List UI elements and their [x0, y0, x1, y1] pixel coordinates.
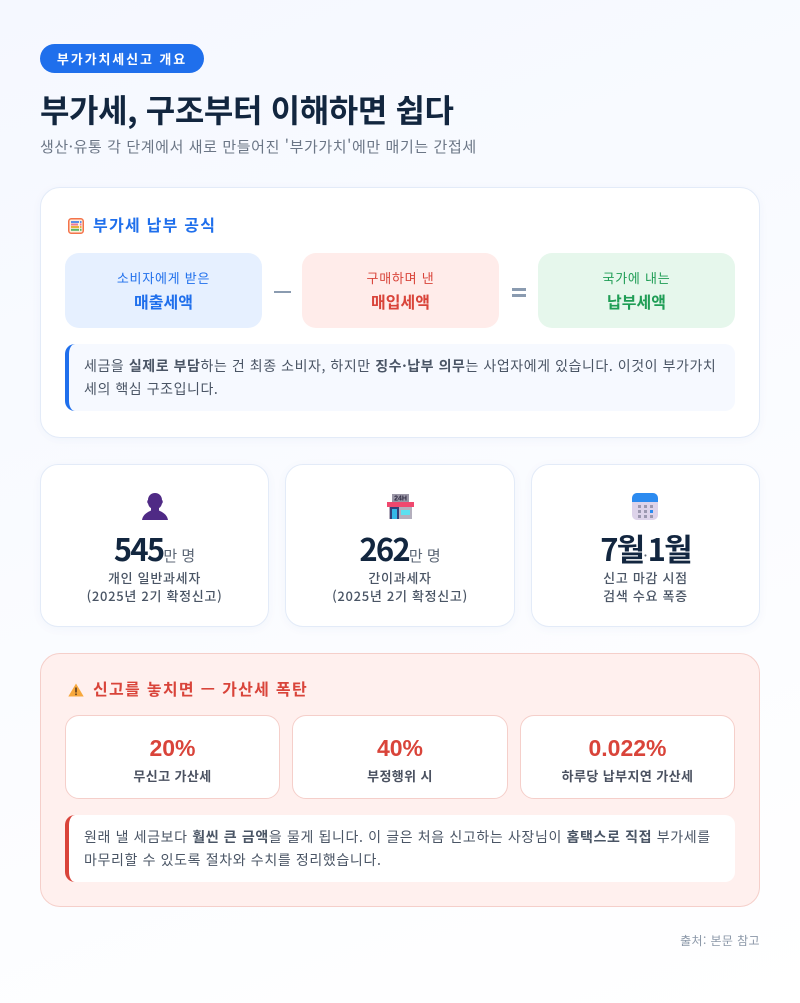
icon: store: 24H	[394, 496, 407, 502]
stat card: simplified taxpayers: (2025년 2기 확정신고)	[332, 586, 468, 605]
penalty card: fraud	[292, 715, 508, 799]
stat card: deadlines	[531, 464, 760, 627]
formula box: payable tax	[538, 253, 735, 328]
stat card: simplified taxpayers: 간이과세자	[368, 568, 432, 587]
panel: formula	[40, 187, 760, 438]
stat card: general taxpayers: 545만 명	[114, 525, 195, 570]
stat card: general taxpayers	[40, 464, 269, 627]
title: 부가세, 구조부터 이해하면 쉽다	[40, 86, 454, 132]
stat card: general taxpayers: 개인 일반과세자	[108, 568, 201, 587]
icon: warning	[68, 684, 84, 696]
callout: formula note	[65, 344, 735, 411]
source: 출처: 본문 참고	[680, 932, 760, 949]
subtitle: 생산·유통 각 단계에서 새로 만들어진 '부가가치'에만 매기는 간접세	[40, 136, 477, 157]
stat card: deadlines: 7월·1월	[600, 525, 691, 570]
stat card: deadlines: 검색 수요 폭증	[603, 586, 688, 605]
badge	[40, 44, 204, 73]
icon: person	[142, 493, 168, 520]
heading: formula: 부가세 납부 공식	[93, 212, 216, 236]
stat card: simplified taxpayers: 262만 명	[359, 525, 441, 570]
formula box: sales tax: 소비자에게 받은	[117, 268, 210, 287]
icon: store	[387, 494, 414, 519]
icon: calendar	[632, 493, 658, 520]
penalty card: no filing	[65, 715, 280, 799]
penalty card: late payment: 하루당 납부지연 가산세	[562, 766, 693, 785]
icon: abacus	[68, 218, 84, 234]
stat card: general taxpayers: (2025년 2기 확정신고)	[87, 586, 222, 605]
formula box: sales tax: 매출세액	[134, 289, 193, 313]
formula box: purchase tax: 구매하며 낸	[367, 268, 434, 287]
stat card: simplified taxpayers	[285, 464, 515, 627]
penalty card: late payment: 0.022%	[588, 735, 666, 761]
penalty card: no filing: 20%	[149, 735, 196, 761]
equals operator	[512, 288, 526, 297]
formula box: payable tax: 납부세액	[607, 289, 666, 313]
penalty card: late payment	[520, 715, 735, 799]
stat card: deadlines: 신고 마감 시점	[603, 568, 688, 587]
callout: penalty note	[65, 815, 735, 882]
formula box: payable tax: 국가에 내는	[603, 268, 670, 287]
callout: formula note: 세금을 실제로 부담하는 건 최종 소비자, 하지만 징수·납부 의무는 사업자에게 있습니다. 이것이 부가가치세의 핵심 구조입니다.	[84, 356, 716, 399]
penalty card: no filing: 무신고 가산세	[133, 766, 212, 785]
penalty card: fraud: 40%	[377, 735, 423, 761]
formula box: purchase tax	[302, 253, 499, 328]
heading: penalties: 신고를 놓치면 — 가산세 폭탄	[93, 676, 308, 700]
formula box: purchase tax: 매입세액	[371, 289, 430, 313]
formula box: sales tax	[65, 253, 262, 328]
panel: penalties	[40, 653, 760, 907]
badge: 부가가치세신고 개요	[57, 49, 187, 68]
penalty card: fraud: 부정행위 시	[367, 766, 433, 785]
callout: penalty note: 원래 낼 세금보다 훨씬 큰 금액을 물게 됩니다. 이 글은 처음 신고하는 사장님이 홈택스로 직접 부가세를 마무리할 수 있도록 절차와 수치를 정리했습니다.	[84, 827, 711, 870]
minus operator	[274, 291, 291, 293]
